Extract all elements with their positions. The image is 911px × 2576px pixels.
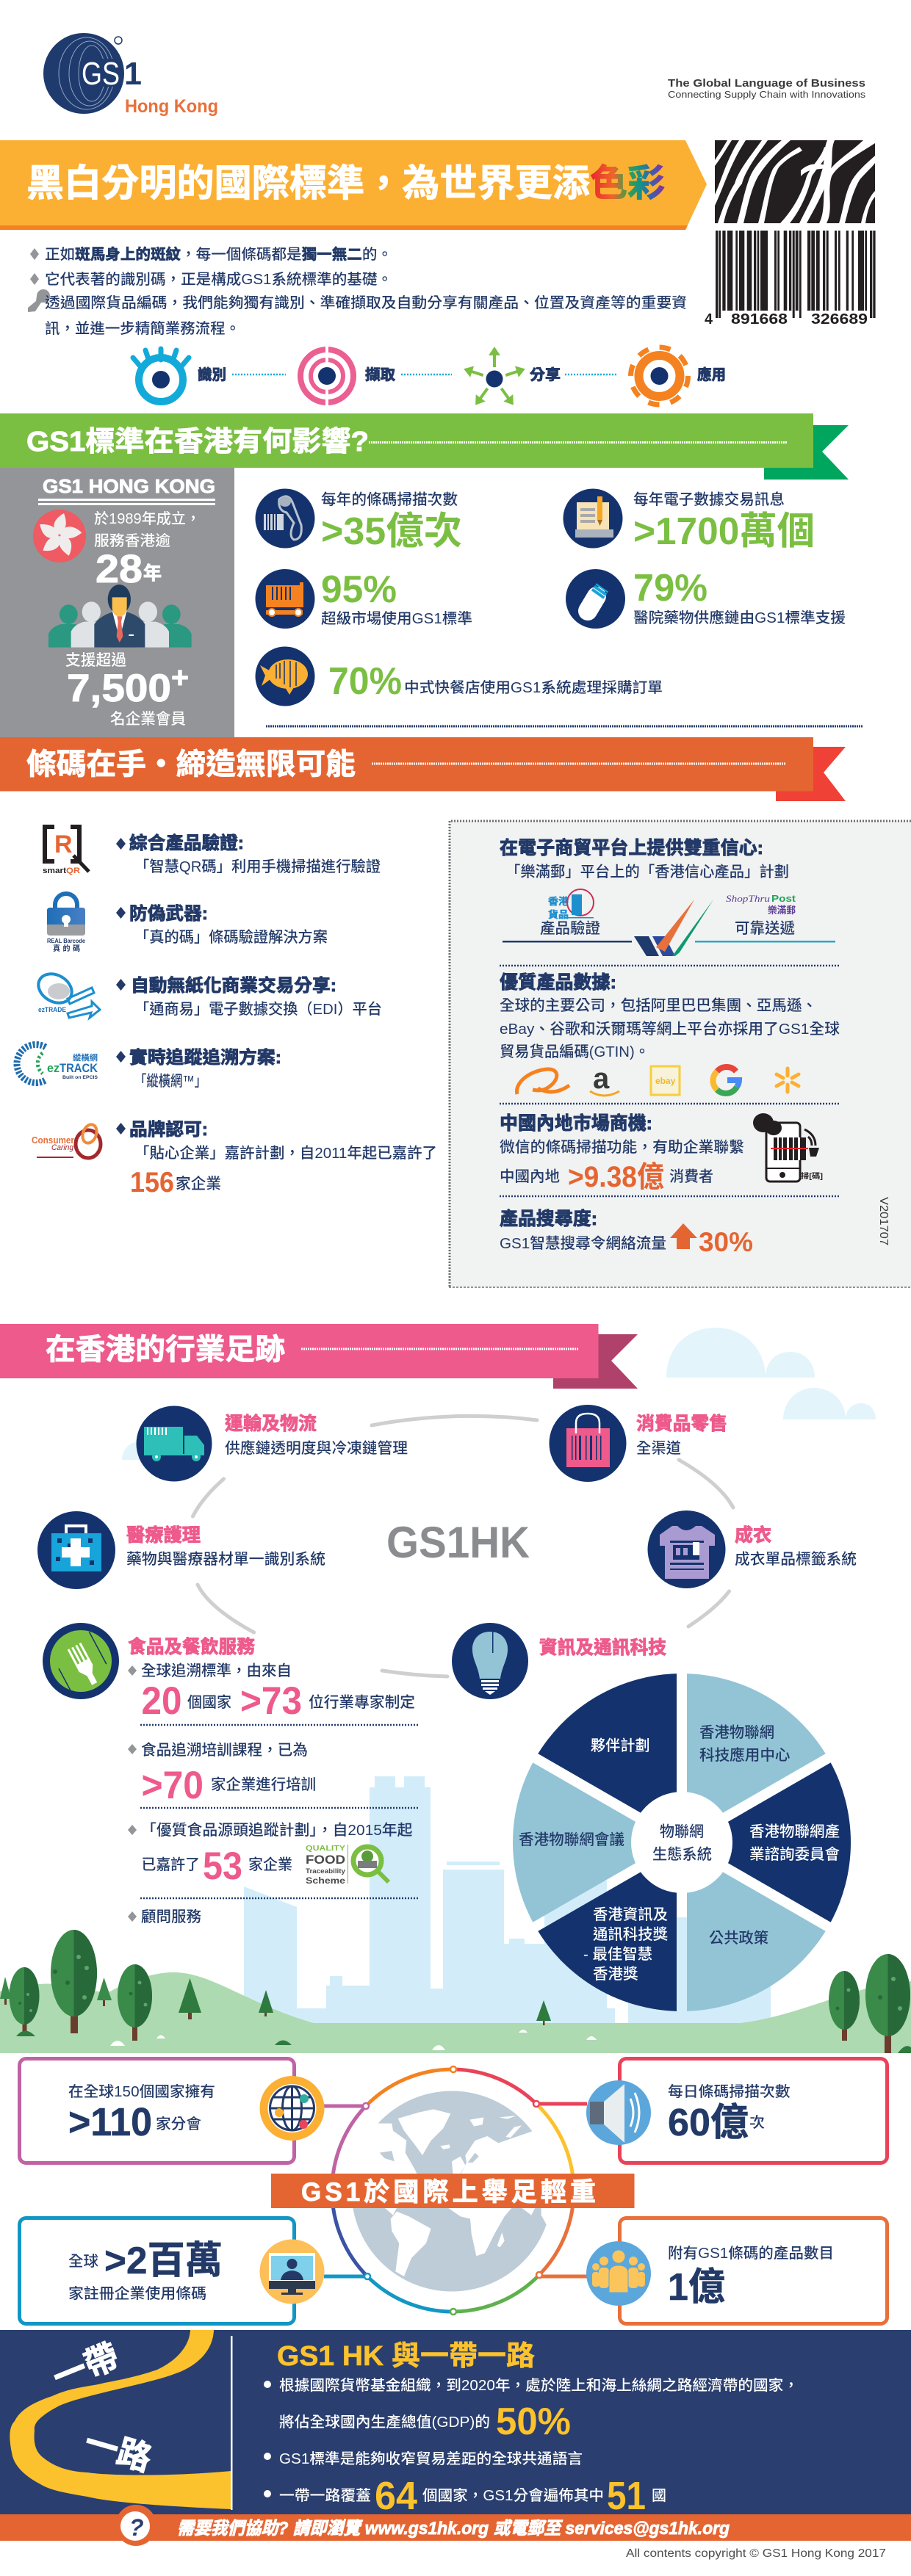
- panel: e-commerce and market: 貿易貨品編碼(GTIN)。: [500, 1043, 649, 1060]
- section banner: industries in Hong Kong: [0, 1324, 638, 1389]
- icon: pill: [588, 587, 602, 611]
- icon: globe: [260, 2076, 325, 2141]
- stat box: member organisations: 家分會: [156, 2116, 201, 2132]
- logo: ezTRACK: ez: [47, 1061, 60, 1075]
- stat box: member organisations: 在全球150個國家擁有: [68, 2083, 215, 2100]
- footer contact bar: 需要我們協助? 請即瀏覽 www.gs1hk.org 或電郵至 services@gs1hk.org: [177, 2519, 730, 2539]
- IoT ecosystem wheel: - 最佳智慧: [583, 1946, 652, 1963]
- clouds: [122, 1328, 876, 1460]
- stat: hospitals 79%: [566, 567, 846, 629]
- logo: ezTRACK: Built on EPCIS: [62, 1076, 98, 1080]
- stat: fast food 70%: [256, 646, 663, 706]
- city skyline: [244, 1776, 771, 2025]
- icon: light bulb: [472, 1632, 508, 1695]
- panel: GS1 HK and Belt and Road: 國: [652, 2488, 666, 2504]
- icon: truck: [144, 1427, 204, 1461]
- heading: quality product data: 優質產品數據:: [500, 972, 616, 993]
- heading: product searchability: 產品搜尋度:: [500, 1209, 597, 1229]
- logo: Amazon: a: [593, 1063, 610, 1095]
- panel: e-commerce and market: 微信的條碼掃描功能，有助企業聯繫: [500, 1139, 744, 1156]
- item: real time tracking: [116, 1047, 281, 1090]
- panel: GS1 HK and Belt and Road: GS1 HK 與一帶一路: [277, 2341, 535, 2372]
- panel: e-commerce and market: GS1智慧搜尋令網絡流量: [500, 1235, 666, 1252]
- process row: identify capture share use: 分享: [530, 366, 561, 383]
- industry: logistics: 運輸及物流: [225, 1414, 317, 1434]
- industry: consumer goods retail: [550, 1405, 727, 1482]
- intro text block: 透過國際貨品編碼，我們能夠獨有識別、準確擷取及自動分享有關產品、位置及資產等的重要資: [45, 294, 687, 311]
- stat: supermarkets 95%: 95%: [321, 568, 397, 611]
- industry: food and catering: 顧問服務: [141, 1909, 201, 1925]
- banner: GS1 global presence: GS1於國際上舉足輕重: [301, 2178, 596, 2207]
- IoT ecosystem wheel: 香港資訊及: [593, 1906, 668, 1923]
- stat box: daily scans: 次: [749, 2114, 765, 2131]
- main title banner: 色彩: [590, 162, 665, 204]
- banner: GS1 global presence: [271, 2174, 635, 2208]
- stat: barcode scans per year: >35億次: [321, 510, 462, 553]
- center label GS1HK: GS1HK: [386, 1518, 530, 1567]
- logo: ShopThru Post: [726, 893, 796, 916]
- icon: WeChat phone scan: 掃[碼]: [801, 1171, 823, 1181]
- panel: GS1 Hong Kong summary: [0, 468, 234, 737]
- industry: food and catering: 家企業進行培訓: [211, 1776, 316, 1793]
- panel: GS1 HK and Belt and Road: [0, 2330, 911, 2518]
- people illustration: [48, 585, 192, 648]
- logo: Quality Food Traceability Scheme: QUALITY: [306, 1845, 345, 1853]
- intro text block: 它代表著的識別碼，正是構成GS1系統標準的基礎。: [45, 271, 392, 288]
- IoT ecosystem wheel: 公共政策: [709, 1930, 768, 1947]
- item: product authentication: 綜合產品驗證:: [129, 833, 244, 853]
- logo: GS1 Hong Kong: [43, 33, 218, 117]
- stat box: registered companies: >2百萬: [104, 2240, 223, 2282]
- icon: question mark: [115, 2505, 156, 2546]
- panel: e-commerce and market: 30%: [699, 1227, 753, 1257]
- main title banner: [0, 140, 707, 230]
- panel: GS1 Hong Kong summary: 28: [96, 547, 143, 591]
- stat box: registered companies: 家註冊企業使用條碼: [68, 2285, 206, 2302]
- icon: capture target: [300, 345, 353, 408]
- section banner: GS1 impact in Hong Kong: [0, 413, 849, 480]
- icon: gear: [630, 347, 688, 405]
- logo: ShopThru Post: ShopThru: [726, 893, 771, 904]
- stat: fast food 70%: 中式快餐店使用GS1系統處理採購訂單: [404, 679, 663, 696]
- section banner: industries in Hong Kong: 在香港的行業足跡: [46, 1334, 285, 1366]
- icon: key: [28, 289, 50, 312]
- item: paperless commerce: 自動無紙化商業交易分享:: [131, 975, 336, 996]
- item: real time tracking: 實時追蹤追溯方案:: [129, 1047, 281, 1068]
- section banner: GS1 impact in Hong Kong: GS1標準在香港有何影響?: [26, 427, 369, 457]
- process row: identify capture share use: [133, 345, 726, 408]
- industry: ICT: [452, 1623, 666, 1699]
- globe with world map: [345, 2091, 561, 2291]
- item: brand recognition: 品牌認可:: [129, 1120, 208, 1140]
- panel: GS1 HK and Belt and Road: 一路: [80, 2423, 156, 2478]
- panel: e-commerce and market: [449, 821, 911, 1287]
- IoT ecosystem wheel: 香港物聯網產: [749, 1823, 840, 1840]
- industry: healthcare: 藥物與醫療器材單一識別系統: [126, 1551, 325, 1568]
- item: anti-counterfeit: 防偽武器:: [129, 904, 208, 924]
- icon: up arrow: [670, 1223, 697, 1249]
- item: product authentication: 「智慧QR碼」利用手機掃描進行驗證: [134, 858, 381, 875]
- intro text block: 正如斑馬身上的斑紋，每一個條碼都是獨一無二的。: [45, 245, 392, 263]
- tagline: The Global Language of Business: [668, 77, 865, 90]
- industry: logistics: [137, 1405, 408, 1482]
- stat: hospitals 79%: 醫院藥物供應鏈由GS1標準支援: [633, 609, 846, 626]
- industry: consumer goods retail: 全渠道: [636, 1440, 681, 1457]
- icon: Hong Kong flag: [33, 510, 86, 562]
- icon: document and pen: [575, 496, 613, 538]
- panel: GS1 HK and Belt and Road: 51: [607, 2474, 646, 2518]
- process row: identify capture share use: 識別: [198, 366, 226, 383]
- icon: shopping bag: [566, 1414, 610, 1467]
- logo: Google: [713, 1067, 739, 1093]
- barcode: 326689: [811, 311, 868, 328]
- industry: food and catering: >70: [141, 1764, 204, 1807]
- panel: GS1 Hong Kong summary: 於1989年成立，: [94, 510, 201, 527]
- logo: ezTRACK: [17, 1044, 98, 1083]
- industry: food and catering: 「優質食品源頭追蹤計劃」，自2015年起: [141, 1822, 413, 1839]
- icon: fork: [50, 1632, 112, 1696]
- stat box: daily scans: 每日條碼掃描次數: [668, 2083, 791, 2100]
- industry: food and catering: 已嘉許了: [141, 1856, 200, 1873]
- IoT ecosystem wheel: 業諮詢委員會: [749, 1846, 840, 1863]
- logo: Real Barcode lock: REAL Barcode: [47, 938, 86, 944]
- logo: eBay: ebay: [655, 1076, 676, 1086]
- item: brand recognition: 家企業: [176, 1176, 221, 1193]
- logo: HK confidence: [548, 889, 594, 920]
- panel: GS1 Hong Kong summary: 年: [143, 563, 162, 584]
- item: brand recognition: 「貼心企業」嘉許計劃，自2011年起已嘉許了: [134, 1145, 437, 1162]
- logo: Quality Food Traceability Scheme: Scheme: [306, 1875, 345, 1886]
- item: paperless commerce: [116, 975, 382, 1018]
- item: product authentication: [116, 833, 381, 875]
- logo: GS1 Hong Kong: GS: [82, 56, 120, 92]
- panel: GS1 HK and Belt and Road: 個國家，GS1分會遍佈其中: [422, 2487, 604, 2504]
- ground and hills: [0, 1972, 911, 2053]
- trees: [0, 1930, 911, 2053]
- logo: Consumer Caring: Consumer: [32, 1135, 74, 1146]
- panel: e-commerce and market: 「樂滿郵」平台上的「香港信心產品」計劃: [505, 864, 789, 880]
- icon: speaker: [586, 2080, 651, 2145]
- icon: people group: [586, 2241, 651, 2306]
- logo: GS1 Hong Kong: Hong Kong: [125, 96, 218, 117]
- panel: GS1 HK and Belt and Road: GS1標準是能夠收窄貿易差距的全球共通語言: [279, 2450, 583, 2467]
- industry: healthcare: [37, 1511, 325, 1589]
- IoT ecosystem wheel: 香港物聯網會議: [519, 1831, 624, 1848]
- logo: GS1 Hong Kong: 1: [124, 56, 142, 92]
- barcode: 4: [705, 311, 713, 328]
- industry: food and catering: 位行業專家制定: [309, 1694, 415, 1711]
- logo: Consumer Caring: Caring: [51, 1143, 74, 1152]
- icon: monitor person: [260, 2240, 325, 2304]
- icon: WeChat phone scan: [753, 1113, 823, 1182]
- connector arcs: [192, 1416, 733, 1676]
- industry: food and catering: 全球追溯標準，由來自: [141, 1663, 292, 1679]
- industry: food and catering: 個國家: [187, 1694, 231, 1711]
- panel: GS1 HK and Belt and Road: 64: [375, 2474, 417, 2518]
- industry: food and catering: 53: [203, 1845, 242, 1888]
- stat box: registered companies: [19, 2218, 294, 2323]
- industry: food and catering: 20: [141, 1679, 182, 1723]
- panel: GS1 Hong Kong summary: 服務香港逾: [94, 532, 170, 549]
- stat box: products with GS1 barcodes: 1億: [668, 2266, 725, 2309]
- IoT ecosystem wheel: 香港獎: [593, 1966, 638, 1983]
- stat: barcode scans per year: 每年的條碼掃描次數: [321, 491, 458, 508]
- version code: V201707: [877, 1197, 890, 1245]
- logo: Consumer Caring: [32, 1123, 101, 1158]
- logo: Amazon: [590, 1063, 619, 1096]
- stat box: daily scans: 60億: [668, 2102, 749, 2144]
- road illustration: [10, 2330, 231, 2509]
- panel: GS1 HK and Belt and Road: 一帶: [47, 2337, 124, 2397]
- stat box: daily scans: [620, 2059, 887, 2163]
- stat: EDI messages per year: 每年電子數據交易訊息: [633, 491, 785, 508]
- stat box: products with GS1 barcodes: [620, 2218, 887, 2323]
- section banner: barcode possibilities: 條碼在手‧締造無限可能: [26, 748, 356, 781]
- industry: apparel: [648, 1510, 857, 1588]
- footer contact bar: [0, 2505, 911, 2546]
- stat: EDI messages per year: >1700萬個: [633, 510, 815, 553]
- logo: smartQR: QR: [66, 866, 80, 875]
- barcode: 891668: [731, 311, 788, 328]
- logo: Real Barcode lock: [47, 894, 86, 953]
- item: anti-counterfeit: [116, 904, 328, 946]
- logo: eBay: [651, 1066, 680, 1095]
- panel: e-commerce and market: eBay、谷歌和沃爾瑪等網上平台亦採用了GS1全球: [500, 1021, 840, 1038]
- panel: GS1 HK and Belt and Road: 根據國際貨幣基金組織，到2020年，處於陸上和海上絲綢之路經濟帶的國家，: [279, 2377, 799, 2394]
- icon: eye: [133, 349, 189, 402]
- logo: HK confidence: 香港: [548, 896, 569, 907]
- logo: smartQR: [43, 822, 89, 875]
- logo: ezTRACK: TRACK: [60, 1061, 98, 1075]
- icon: medical kit: [51, 1526, 101, 1571]
- logo: Quality Food Traceability Scheme: [306, 1845, 389, 1886]
- section banner: barcode possibilities: [0, 737, 846, 801]
- item: brand recognition: 156: [130, 1167, 174, 1198]
- industry: food and catering: 家企業: [248, 1856, 292, 1873]
- panel: e-commerce and market: 產品驗證: [540, 919, 600, 937]
- panel: GS1 Hong Kong summary: 名企業會員: [110, 711, 186, 728]
- logo: smartQR: R: [54, 831, 73, 858]
- logo: Walmart: [777, 1068, 799, 1092]
- IoT ecosystem wheel: 夥伴計劃: [591, 1737, 649, 1754]
- industry: logistics: 供應鏈透明度與冷凍鏈管理: [225, 1439, 408, 1457]
- heading: double confidence: 在電子商貿平台上提供雙重信心:: [500, 837, 763, 858]
- panel: GS1 Hong Kong summary: +: [171, 662, 189, 694]
- logo: ezTRADE: [33, 968, 100, 1018]
- industry: healthcare: 醫療護理: [126, 1525, 201, 1546]
- panel: e-commerce and market: >9.38億: [568, 1161, 664, 1193]
- stat: hospitals 79%: 79%: [633, 567, 707, 609]
- logo: Quality Food Traceability Scheme: Traceability: [306, 1867, 345, 1875]
- IoT ecosystem wheel: 科技應用中心: [699, 1746, 791, 1764]
- zebra pattern: [715, 140, 875, 223]
- industry: apparel: 成衣單品標籤系統: [735, 1551, 857, 1568]
- logo: ShopThru Post: Post: [771, 893, 796, 904]
- main title banner: 黑白分明的國際標準，為世界更添: [26, 162, 590, 204]
- stat: fast food 70%: 70%: [328, 660, 402, 703]
- logo: HK confidence: 貨品: [548, 909, 569, 920]
- panel: GS1 Hong Kong summary: 7,500: [67, 667, 171, 710]
- industry: ICT: 資訊及通訊科技: [539, 1638, 666, 1658]
- process row: identify capture share use: 擷取: [365, 366, 395, 383]
- panel: e-commerce and market: 全球的主要公司，包括阿里巴巴集團、亞馬遜、: [500, 997, 817, 1014]
- item: brand recognition: [116, 1120, 437, 1198]
- intro text block: [28, 245, 687, 337]
- industry: food and catering: 食品及餐飲服務: [128, 1636, 255, 1657]
- globe ring with segments and connectors: [324, 2066, 587, 2315]
- panel: GS1 HK and Belt and Road: 將佔全球國內生產總值(GDP)的: [279, 2414, 490, 2431]
- logo: ezTRACK: 縱橫網: [73, 1052, 98, 1063]
- logo: Real Barcode lock: 真的碼: [53, 944, 80, 953]
- stat box: registered companies: 全球: [68, 2253, 98, 2270]
- logo: ezTRADE: ezTRADE: [38, 1006, 66, 1013]
- IoT ecosystem wheel: 通訊科技獎: [593, 1926, 668, 1943]
- intro text block: 訊，並進一步精簡業務流程。: [45, 320, 240, 337]
- industry: apparel: 成衣: [735, 1525, 771, 1546]
- icon: scanner: [264, 496, 301, 540]
- IoT ecosystem wheel: 生態系統: [652, 1846, 712, 1863]
- process row: identify capture share use: 應用: [697, 366, 726, 383]
- panel: GS1 Hong Kong summary: 支援超過: [65, 652, 126, 669]
- logo: ShopThru Post: 樂滿郵: [768, 905, 796, 916]
- icon: double check: [634, 900, 713, 956]
- stat box: member organisations: [19, 2059, 294, 2163]
- stat: barcode scans per year: [256, 489, 462, 553]
- icon: shirt: [660, 1526, 715, 1579]
- stat box: member organisations: >110: [68, 2100, 152, 2144]
- industry: food and catering: >73: [240, 1679, 302, 1723]
- tagline: [668, 77, 866, 100]
- panel: GS1 Hong Kong summary: GS1 HONG KONG: [43, 475, 215, 497]
- stat box: products with GS1 barcodes: 附有GS1條碼的產品數目: [668, 2245, 834, 2262]
- item: paperless commerce: 「通商易」電子數據交換（EDI）平台: [134, 1001, 382, 1018]
- stat: supermarkets 95%: [256, 568, 472, 629]
- logo: smartQR: smart: [43, 866, 66, 875]
- stat: supermarkets 95%: 超級市場使用GS1標準: [321, 610, 472, 627]
- icon: fish: [260, 659, 308, 695]
- item: real time tracking: 「縱橫網™」: [134, 1073, 206, 1090]
- industry: food and catering: [43, 1623, 418, 1925]
- tagline: Connecting Supply Chain with Innovations: [668, 89, 866, 100]
- panel: e-commerce and market: 消費者: [669, 1168, 713, 1185]
- panel: e-commerce and market: 中國內地: [500, 1168, 560, 1185]
- barcode: [705, 231, 876, 328]
- IoT ecosystem wheel: 香港物聯網: [699, 1724, 774, 1741]
- panel: GS1 HK and Belt and Road: 50%: [496, 2400, 571, 2443]
- panel: GS1 HK and Belt and Road: 一帶一路覆蓋: [279, 2487, 371, 2504]
- industry: food and catering: 食品追溯培訓課程，已為: [141, 1742, 308, 1759]
- IoT ecosystem wheel: 物聯網: [660, 1823, 704, 1840]
- item: anti-counterfeit: 「真的碼」條碼驗證解決方案: [134, 928, 328, 946]
- IoT ecosystem wheel: [513, 1674, 851, 2011]
- panel: e-commerce and market: 可靠送遞: [735, 920, 795, 937]
- industry: consumer goods retail: 消費品零售: [636, 1414, 727, 1434]
- icon: shopping cart: [266, 582, 303, 616]
- logo: Quality Food Traceability Scheme: FOOD: [306, 1853, 345, 1867]
- stat: EDI messages per year: [563, 489, 815, 553]
- icon: share arrows: [462, 347, 527, 408]
- copyright: All contents copyright © GS1 Hong Kong 2017: [626, 2547, 886, 2560]
- heading: mainland China: 中國內地市場商機:: [500, 1113, 652, 1134]
- logo: Alibaba: [516, 1069, 569, 1094]
- icon: question mark: ?: [129, 2514, 144, 2541]
